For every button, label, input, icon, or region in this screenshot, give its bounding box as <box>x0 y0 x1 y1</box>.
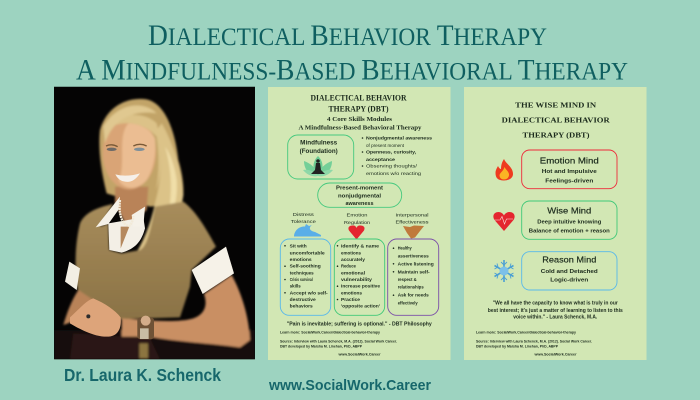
philosophy quote: "Pain is inevitable; suffering is optional." - DBT Philosophy <box>287 322 433 328</box>
panel heading: 4 Core Skills Modules <box>327 116 393 123</box>
reason mind box: Reason Mind <box>542 255 597 265</box>
column: distress tolerance <box>291 212 321 236</box>
mindfulness bullet list: acceptance <box>366 157 395 163</box>
distress tolerance list: Self-soothing <box>290 264 321 269</box>
panel: the wise mind <box>464 87 646 360</box>
mindfulness bullet list <box>362 136 432 177</box>
reason mind box: Cold and Detached <box>541 269 598 275</box>
wise mind box: Deep intuitive knowing <box>537 219 601 225</box>
icon: flame <box>496 159 513 180</box>
panel heading: THERAPY (DBT) <box>328 105 389 114</box>
interpersonal effectiveness list: respect & <box>398 277 417 282</box>
emotion regulation list <box>334 239 385 315</box>
emotion regulation list: Identify & name <box>341 243 379 248</box>
column: interpersonal effectiveness: Interpersonal <box>396 212 428 218</box>
present-moment oval: awareness <box>346 201 374 207</box>
emotion mind box <box>522 150 617 189</box>
distress tolerance list: Sit with <box>290 243 307 248</box>
icon: meditating figure on lotus <box>303 156 333 176</box>
sources footer: www.SocialWork.Career <box>337 352 381 356</box>
wise mind quote <box>488 301 623 320</box>
portrait photo <box>54 87 255 359</box>
title: DIALECTICAL BEHAVIOR THERAPY <box>148 19 547 52</box>
interpersonal effectiveness list: assertiveness <box>398 254 429 259</box>
emotion mind box: Feelings-driven <box>545 179 594 185</box>
icon: clasped hands <box>403 226 424 238</box>
emotion regulation list: emotional <box>341 270 365 275</box>
wise mind quote: best interest; it's just a matter of learning to listen to this <box>488 308 623 314</box>
sources footer: Learn more: SocialWork.Career/dialectical-behavior-therapy <box>476 330 576 334</box>
panel heading: THE WISE MIND IN <box>515 100 597 109</box>
mindfulness box: (Foundation) <box>300 149 338 155</box>
sources footer: DBT developed by Marsha M. Linehan, PhD, ABPP <box>476 345 559 349</box>
name caption: Dr. Laura K. Schenck <box>64 365 221 385</box>
distress tolerance list: behaviors <box>290 304 313 309</box>
emotion regulation list: emotions <box>341 250 361 255</box>
title <box>76 19 628 86</box>
distress tolerance list: uncomfortable <box>290 250 325 255</box>
website address: www.SocialWork.Career <box>268 377 431 394</box>
column: interpersonal effectiveness <box>396 212 429 238</box>
emotion regulation list: Increase positive <box>341 284 380 289</box>
mindfulness bullet list: Nonjudgmental awareness <box>366 136 432 142</box>
column: distress tolerance: Tolerance <box>291 219 316 225</box>
interpersonal effectiveness list: effectively <box>398 300 418 305</box>
distress tolerance list: Crisis survival <box>290 277 313 282</box>
mindfulness bullet list: of present moment <box>366 143 405 149</box>
interpersonal effectiveness list <box>388 239 439 315</box>
column: emotion regulation: Emotion <box>346 213 368 219</box>
distress tolerance list: emotions <box>290 257 312 262</box>
sources footer: www.SocialWork.Career <box>533 352 577 356</box>
sources footer <box>476 330 592 356</box>
sources footer: Source: Interview with Laura Schenck, M.A. (2012). Social Work Career. <box>280 340 397 344</box>
present-moment oval: Present-moment <box>336 186 383 192</box>
column: emotion regulation <box>344 213 370 240</box>
panel heading <box>298 94 423 132</box>
interpersonal effectiveness list: Active listening <box>398 261 434 266</box>
sources footer <box>280 330 397 356</box>
icon: snowflake <box>494 260 514 282</box>
panel: DBT core skills modules <box>268 87 450 360</box>
panel heading: DIALECTICAL BEHAVIOR <box>310 94 407 103</box>
panel heading: A Mindfulness-Based Behavioral Therapy <box>298 125 423 132</box>
mindfulness bullet list: Openness, curiosity, <box>366 150 417 156</box>
interpersonal effectiveness list: Healthy <box>398 246 412 251</box>
present-moment oval <box>318 183 402 207</box>
column: emotion regulation: Regulation <box>344 220 370 226</box>
emotion mind box: Emotion Mind <box>540 155 599 165</box>
panel heading: THERAPY (DBT) <box>522 131 590 140</box>
reason mind box <box>522 252 617 290</box>
mindfulness box: Mindfulness <box>300 141 338 147</box>
distress tolerance list <box>280 239 331 315</box>
wise mind box: Wise Mind <box>547 205 592 215</box>
distress tolerance list: destructive <box>290 297 316 302</box>
distress tolerance list: Accept w/o self- <box>290 290 328 295</box>
present-moment oval: nonjudgmental <box>338 193 382 199</box>
emotion regulation list: 'opposite action' <box>341 304 380 309</box>
panel heading: DIALECTICAL BEHAVIOR <box>502 116 610 125</box>
sources footer: DBT developed by Marsha M. Linehan, PhD, ABPP <box>280 345 363 349</box>
icon: wave <box>294 224 321 236</box>
white blouse and collar <box>65 144 234 339</box>
title: A MINDFULNESS-BASED BEHAVIORAL THERAPY <box>76 54 628 86</box>
mindfulness bullet list: emotions w/o reacting <box>366 171 421 177</box>
emotion regulation list: accurately <box>341 257 365 262</box>
interpersonal effectiveness list: relationships <box>398 285 424 290</box>
reason mind box: Logic-driven <box>550 278 589 284</box>
emotion mind box: Hot and Impulsive <box>542 169 598 175</box>
panel heading <box>502 100 610 140</box>
column: distress tolerance: Distress <box>293 212 315 218</box>
sources footer: Learn more: SocialWork.Career/dialectical-behavior-therapy <box>280 330 380 334</box>
wise mind box: Balance of emotion + reason <box>529 229 610 235</box>
emotion regulation list: vulnerability <box>341 277 372 282</box>
wise mind quote: "We all have the capacity to know what is truly in our <box>493 301 618 307</box>
emotion regulation list: Reduce <box>341 264 356 269</box>
mindfulness bullet list: Observing thoughts/ <box>366 164 418 170</box>
emotion regulation list: Practice <box>341 297 360 302</box>
column: interpersonal effectiveness: Effectiveness <box>396 219 429 225</box>
sources footer: Source: Interview with Laura Schenck, M.A. (2012). Social Work Career. <box>476 340 592 344</box>
distress tolerance list: techniques <box>290 270 314 275</box>
icon: heartbeat heart <box>493 212 515 231</box>
mindfulness box <box>288 135 354 179</box>
icon: heart <box>348 226 365 240</box>
wise mind box <box>522 201 617 239</box>
distress tolerance list: skills <box>290 284 301 289</box>
wise mind quote: voice within." - Laura Schenck, M.A. <box>513 314 598 320</box>
interpersonal effectiveness list: Maintain self- <box>398 269 430 274</box>
emotion regulation list: emotions <box>341 290 362 295</box>
interpersonal effectiveness list: Ask for needs <box>398 293 429 298</box>
